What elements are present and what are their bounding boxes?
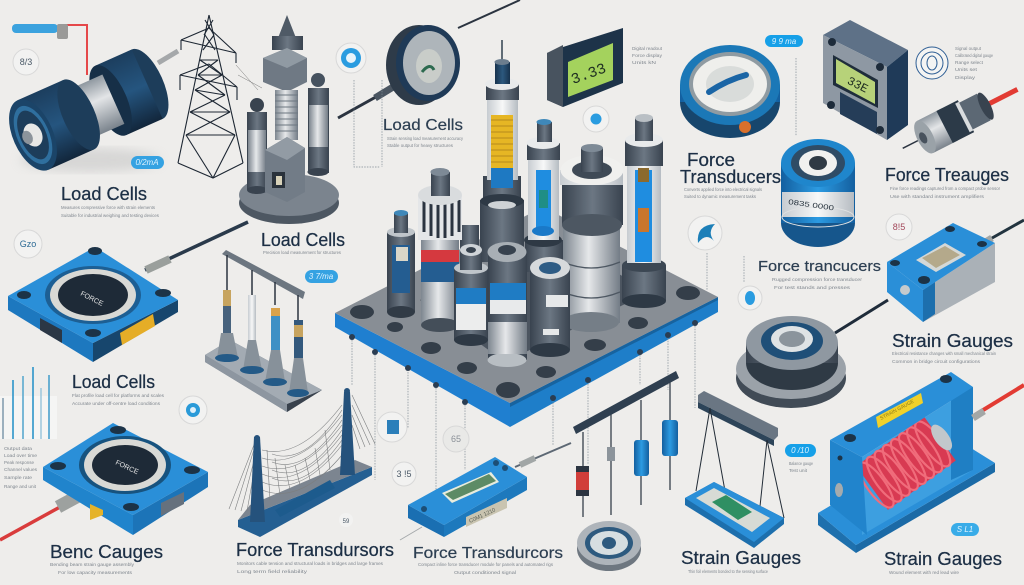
- rack beam: [222, 250, 305, 299]
- heading: Strain Gauges: [892, 331, 1013, 351]
- description: Measures compressive force with strain elements: [61, 205, 156, 210]
- panel: blue cylinder: [688, 139, 912, 290]
- description: Thin foil elements bonded to the sensing surface: [688, 569, 768, 574]
- badge: [443, 426, 469, 452]
- description: Range select: [955, 60, 984, 65]
- heading: Load Cells: [383, 117, 463, 134]
- pill: [785, 444, 816, 457]
- badge: [14, 230, 42, 258]
- plate holes: [350, 286, 700, 398]
- description: Monitors cable tension and structural loads in bridges and large frames: [237, 561, 384, 566]
- bar: [573, 371, 679, 434]
- description: Accurate under off-centre load conditions: [72, 401, 161, 406]
- description: Digital readout: [632, 46, 663, 51]
- badge: [392, 462, 416, 486]
- description: [892, 351, 996, 364]
- icon: transmission tower: [178, 15, 262, 178]
- description: For test stands and presses: [774, 285, 851, 290]
- load cell cylinder: [0, 43, 177, 178]
- rods: [583, 380, 670, 517]
- coil: [853, 411, 963, 512]
- right post: [308, 73, 329, 176]
- pill: [305, 270, 338, 283]
- block: [887, 223, 995, 322]
- panel: bottom blue plate: [0, 396, 208, 540]
- icon: circle: [583, 106, 609, 132]
- description: Stable output for heavy structures: [387, 143, 454, 148]
- chart description: [4, 446, 38, 489]
- chart description: Load over time: [4, 453, 37, 458]
- sensor bodies: [576, 420, 678, 496]
- heading: Benc Cauges: [50, 542, 163, 562]
- panel: central load cell array: [335, 40, 718, 505]
- description: For low capacity measurements: [58, 570, 133, 575]
- panel: rack of rods: [205, 250, 322, 412]
- dial: [386, 25, 460, 105]
- description: Suitable for industrial weighing and testing devices: [61, 213, 160, 218]
- left post: [247, 98, 267, 194]
- beam: [698, 391, 778, 446]
- icon: bird: [688, 216, 722, 250]
- description: Test unit: [789, 468, 808, 473]
- cable: [835, 300, 888, 333]
- disk sensor: [577, 521, 641, 571]
- pill: [131, 156, 164, 169]
- front frame: [830, 372, 973, 535]
- description: [237, 561, 384, 574]
- block: [408, 457, 527, 537]
- panel: dial puck: [680, 35, 803, 199]
- description: Precision load measurement for structures: [263, 250, 342, 255]
- description: [789, 461, 813, 473]
- panel: load cell tower with posts: [239, 15, 339, 224]
- puck: [680, 45, 780, 138]
- heading: Strain Gauges: [884, 549, 1002, 569]
- description: [418, 562, 554, 575]
- badge: 3 !5: [396, 469, 412, 479]
- description: [890, 186, 1000, 199]
- chart description: Sample rate: [4, 475, 32, 480]
- shadow: [20, 148, 160, 172]
- rods: [215, 255, 309, 397]
- pill: S L1: [957, 525, 973, 534]
- heading: Force Transdurcors: [413, 545, 563, 562]
- red cable: [975, 385, 1024, 415]
- cylinder: red banded: [418, 168, 462, 332]
- cable: [985, 220, 1024, 242]
- heading: Force trancucers: [758, 258, 881, 275]
- cylinder: blue tube: [524, 119, 563, 272]
- heading: Force Transdursors: [236, 540, 394, 560]
- badge: 65: [451, 434, 461, 444]
- badge: 8!5: [893, 222, 905, 232]
- label text: STRAIN GAUGE: [879, 398, 916, 422]
- icon: blue circle: [738, 286, 762, 310]
- ring: [736, 316, 846, 408]
- cable: [338, 0, 520, 118]
- pill: [765, 35, 803, 47]
- badge: 8/3: [20, 57, 32, 67]
- description: Strain sensing load measurement accuracy: [387, 136, 464, 141]
- description: Output conditioned signal: [454, 570, 516, 575]
- cylinder: right blue tube: [622, 114, 666, 308]
- cylinder label: 0835 0000: [788, 199, 834, 212]
- description: Compact inline force transducer module for panels and automated rigs: [418, 562, 554, 567]
- badge: [339, 513, 353, 527]
- heading: Load Cells: [261, 230, 345, 250]
- plate text: FORCE: [79, 291, 104, 308]
- panel: red coil frame: [818, 372, 1024, 553]
- description: Suited to dynamic measurement tasks: [684, 194, 757, 199]
- base: [239, 174, 339, 224]
- panel: hanging scale: [685, 391, 816, 548]
- description: [61, 205, 160, 218]
- pill: 9 9 ma: [772, 37, 797, 46]
- icon: blue circle: [179, 396, 207, 424]
- block label: C0M1 1210: [468, 507, 497, 525]
- panel: top-left load cell: [0, 24, 178, 218]
- panel: left blue plate: [8, 222, 248, 362]
- badge: Gzo: [20, 239, 36, 249]
- bridge cables: [229, 395, 375, 511]
- description: Balance gauge: [789, 461, 813, 466]
- heading: Strain Gauges: [681, 548, 801, 568]
- badge: [886, 214, 912, 240]
- rack base: [205, 340, 322, 412]
- strings: [696, 408, 784, 535]
- description: [955, 46, 993, 80]
- description: [632, 46, 663, 65]
- description: [387, 136, 464, 148]
- panel: hanging sensors: [573, 371, 679, 571]
- pill: 0/2mA: [135, 158, 159, 167]
- connector: [973, 411, 984, 418]
- yellow label: [876, 393, 923, 428]
- cylinder: rear dark: [460, 225, 479, 267]
- description: [772, 277, 863, 290]
- description: Long term field reliability: [237, 569, 308, 574]
- panel: digital display: [547, 28, 663, 132]
- connector: [976, 238, 992, 248]
- cable: [145, 222, 248, 270]
- description: [50, 562, 135, 575]
- plate: [43, 423, 208, 535]
- chart description: Range and unit: [4, 484, 37, 489]
- cylinder: yellow coil: [480, 40, 524, 262]
- icon: blue and red cable: [12, 24, 178, 75]
- badge: 59: [343, 519, 350, 525]
- panel: force transducer block: [400, 443, 571, 540]
- icon: blue badge: [377, 412, 407, 442]
- display body: [547, 28, 623, 107]
- cable: [400, 443, 571, 540]
- description: Electrical resistance changes with small mechanical strain: [892, 351, 996, 356]
- plate: [335, 207, 718, 427]
- heading: Load Cells: [61, 184, 147, 204]
- description: Signal output: [955, 46, 982, 51]
- description: Calibrated digital gauge: [955, 53, 993, 58]
- description: [72, 393, 165, 406]
- description: Fine force readings captured from a compact probe sensor: [890, 186, 1000, 191]
- icon: target rings: [916, 47, 948, 79]
- chart description: Output data: [4, 446, 33, 451]
- back post and inner wall: [862, 387, 973, 535]
- probe: [895, 74, 1024, 164]
- description: Use with standard instrument amplifiers: [890, 194, 985, 199]
- plate text: FORCE: [114, 459, 140, 476]
- central column: [263, 15, 307, 202]
- base: [818, 435, 995, 553]
- cylinder: front labelled: [488, 242, 527, 367]
- plate: [8, 247, 178, 362]
- cylinder: front dark: [530, 257, 570, 357]
- description: Display: [955, 75, 976, 80]
- reading: 3.33: [569, 61, 609, 89]
- description: Units kN: [632, 60, 656, 65]
- icon: blue circle: [336, 43, 366, 73]
- heading: Transducers: [680, 167, 781, 187]
- pill: [951, 523, 979, 536]
- description: Rugged compression force transducer: [772, 277, 863, 282]
- description: Converts applied force into electrical signals: [684, 187, 763, 192]
- panel: right sensor block: [887, 220, 1024, 322]
- pill: 0 /10: [791, 446, 809, 455]
- description: Units set: [955, 67, 978, 72]
- panel: gauge sensor: [336, 0, 520, 167]
- cylinder: left small: [387, 210, 415, 318]
- description: [684, 187, 763, 199]
- description: Common in bridge circuit configurations: [892, 359, 981, 364]
- panel: digital device: [823, 20, 993, 140]
- panel: suspension bridge: [229, 388, 375, 537]
- tray: [685, 482, 784, 548]
- cylinder: small labelled: [454, 244, 488, 346]
- heading: Force Treauges: [885, 165, 1009, 185]
- heading: Force: [687, 150, 735, 170]
- device: [823, 20, 908, 140]
- description: Flat profile load cell for platforms and scales: [72, 393, 165, 398]
- chart description: Channel values: [4, 467, 38, 472]
- bridge deck: [238, 460, 372, 537]
- chart description: Peak response: [4, 460, 34, 465]
- reading: 33E: [845, 74, 870, 96]
- description: Wound element with red lead wire: [889, 570, 959, 575]
- description: Bending beam strain gauge assembly: [50, 562, 135, 567]
- panel: bearing load ring: [736, 286, 888, 408]
- description: Force display: [632, 53, 663, 58]
- pill: 3 7/ma: [309, 272, 334, 281]
- red cable: [0, 494, 82, 540]
- heading: Load Cells: [72, 372, 155, 392]
- panel: probe sensor: [895, 74, 1024, 164]
- bridge towers: [250, 388, 355, 522]
- cylinder: [781, 139, 855, 247]
- cylinder: large body: [560, 144, 624, 332]
- hooks and leader lines: [349, 320, 698, 505]
- bar chart: [0, 367, 57, 439]
- badge: [13, 49, 39, 75]
